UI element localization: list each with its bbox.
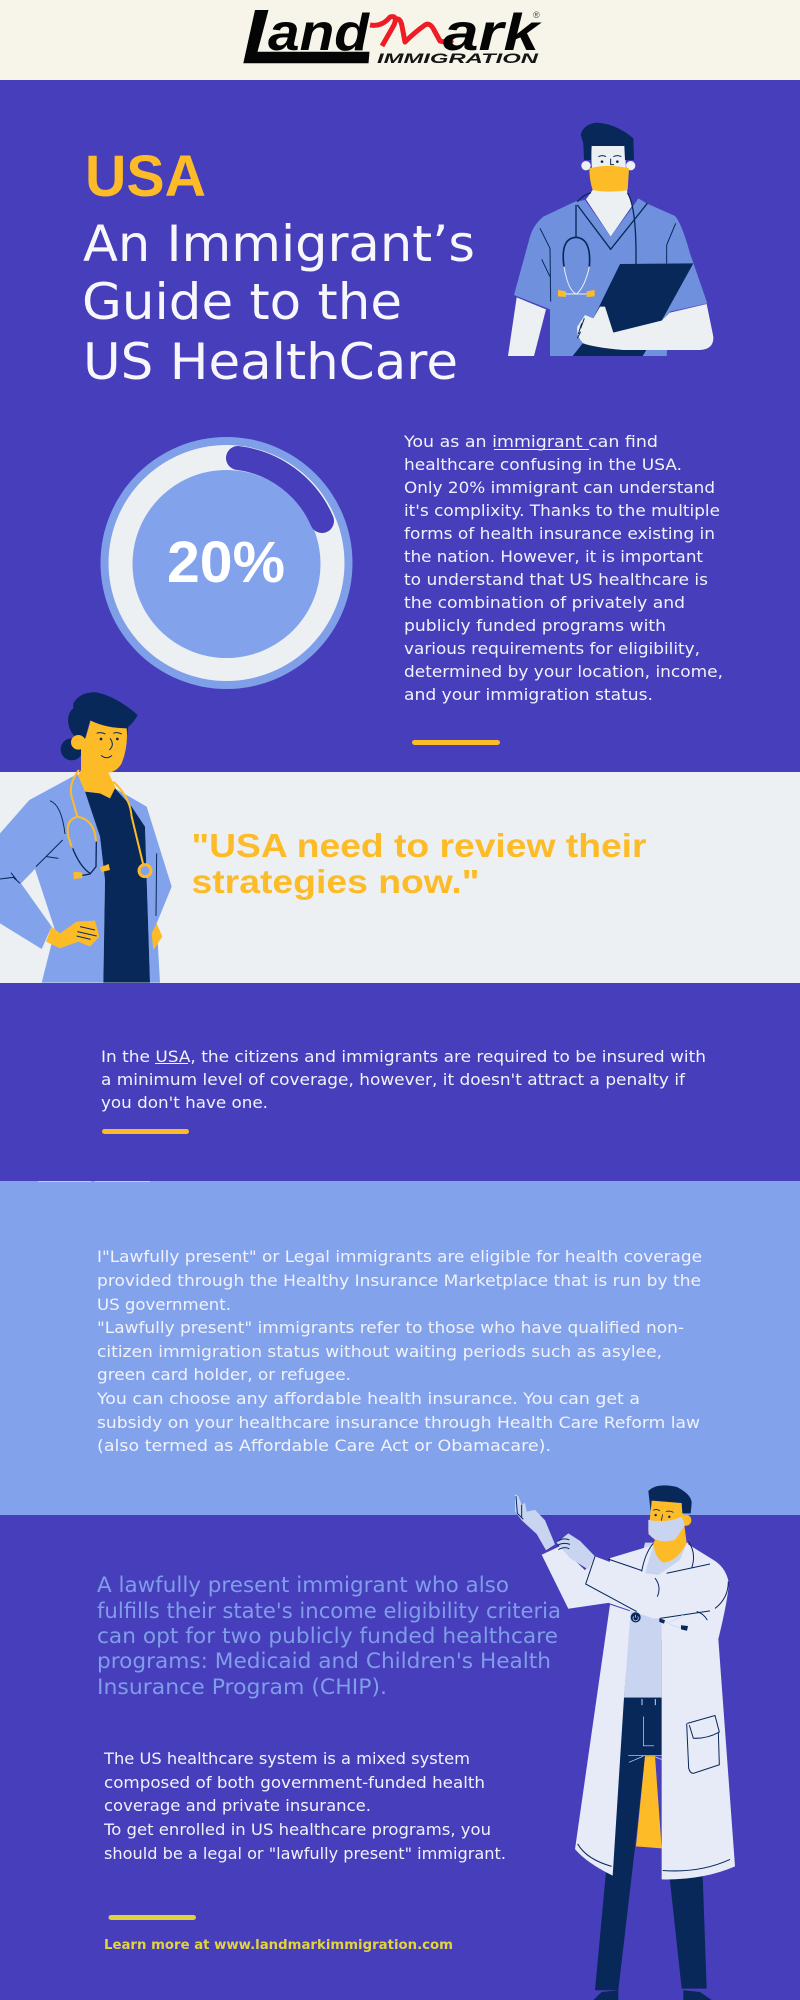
text block: insurance requirement: you don't have one. — [101, 1093, 268, 1112]
title: An Immigrant's Guide to the US HealthCare: Guide to the — [82, 273, 402, 331]
accent bar — [102, 1129, 189, 1134]
text block: eligibility details: "Lawfully present" immigrants refer to those who have qualified non- — [97, 1318, 684, 1337]
text block: Medicaid and CHIP highlight: Insurance Program (CHIP). — [97, 1675, 387, 1699]
text block: mixed healthcare system: To get enrolled in US healthcare programs, you — [103, 1820, 491, 1839]
text block: Medicaid and CHIP highlight — [97, 1573, 561, 1699]
text block: intro paragraph: publicly funded programs with — [404, 616, 666, 635]
quote text — [192, 827, 647, 900]
text block: eligibility details: I"Lawfully present" or Legal immigrants are eligible for health coverage — [97, 1247, 702, 1266]
panel: lawfully present immigrants — [0, 1181, 800, 1515]
text block: eligibility details: subsidy on your healthcare insurance through Health Care Reform law — [97, 1413, 700, 1432]
title: An Immigrant's Guide to the US HealthCare: An Immigrant’s — [83, 215, 475, 273]
text block: intro paragraph: You as an immigrant can find — [403, 432, 658, 451]
illustration: female doctor with stethoscope — [0, 692, 172, 983]
text block: mixed healthcare system — [103, 1749, 506, 1863]
text block: intro paragraph: the combination of privately and — [404, 593, 685, 612]
text block: eligibility details: US government. — [97, 1295, 231, 1314]
text block: intro paragraph: to understand that US healthcare is — [404, 570, 708, 589]
logo: Landmark Immigration: ark — [443, 4, 543, 62]
accent bar — [108, 1915, 196, 1920]
text block: Medicaid and CHIP highlight: fulfills their state's income eligibility criteria — [97, 1599, 561, 1623]
text block: intro paragraph — [403, 432, 723, 704]
text block: insurance requirement: In the USA, the citizens and immigrants are required to be insured with — [101, 1047, 706, 1066]
text block: intro paragraph: various requirements for eligibility, — [404, 639, 700, 658]
logo: Landmark Immigration: IMMIGRATION — [377, 50, 539, 66]
panel: quote band — [0, 772, 800, 983]
logo: Landmark Immigration: ® — [533, 10, 540, 20]
text block: insurance requirement — [101, 1047, 706, 1112]
text block: Medicaid and CHIP highlight: programs: Medicaid and Children's Health — [97, 1649, 551, 1673]
text block: insurance requirement: a minimum level of coverage, however, it doesn't attract a penalty if — [101, 1070, 685, 1089]
accent bar — [412, 740, 500, 745]
title: An Immigrant's Guide to the US HealthCare — [82, 215, 475, 391]
text block: eligibility details: provided through the Healthy Insurance Marketplace that is run by the — [97, 1271, 701, 1290]
text block: eligibility details: You can choose any affordable health insurance. You can get a — [96, 1389, 640, 1408]
text block: intro paragraph: the nation. However, it is important — [404, 547, 703, 566]
text block: intro paragraph: Only 20% immigrant can understand — [404, 478, 715, 497]
chart value: 20%: 20% — [167, 530, 285, 595]
text block: Medicaid and CHIP highlight: can opt for two publicly funded healthcare — [97, 1624, 558, 1648]
text block: intro paragraph: it's complixity. Thanks to the multiple — [404, 501, 720, 520]
panel: logo header — [0, 0, 800, 80]
text block: mixed healthcare system: coverage and private insurance. — [104, 1796, 371, 1815]
title: USA: USA — [85, 144, 206, 209]
quote text: "USA need to review their — [192, 827, 647, 864]
text block: intro paragraph: determined by your location, income, — [404, 662, 723, 681]
text block: intro paragraph: and your immigration status. — [404, 685, 653, 704]
logo: Landmark Immigration: and — [268, 4, 370, 62]
quote text: strategies now." — [192, 863, 480, 900]
text block: mixed healthcare system: composed of both government-funded health — [104, 1773, 485, 1792]
text block: eligibility details: citizen immigration status without waiting periods such as asylee, — [97, 1342, 662, 1361]
title: An Immigrant's Guide to the US HealthCare: US HealthCare — [83, 333, 458, 391]
illustration: doctor in white coat pointing up — [515, 1485, 735, 2000]
text block: mixed healthcare system: The US healthcare system is a mixed system — [103, 1749, 470, 1768]
text block: eligibility details: green card holder, or refugee. — [97, 1365, 351, 1384]
illustration: masked nurse with clipboard — [508, 123, 713, 356]
logo: Landmark Immigration — [243, 4, 543, 66]
call to action: website: Learn more at www.landmarkimmigration.com — [104, 1938, 453, 1953]
chart: 20% progress ring — [100, 437, 352, 689]
text block: mixed healthcare system: should be a legal or "lawfully present" immigrant. — [104, 1844, 506, 1863]
text block: intro paragraph: forms of health insurance existing in — [404, 524, 715, 543]
text block: eligibility details — [96, 1247, 702, 1455]
text block: Medicaid and CHIP highlight: A lawfully present immigrant who also — [97, 1573, 509, 1597]
text block: intro paragraph: healthcare confusing in the USA. — [404, 455, 682, 474]
text block: eligibility details: (also termed as Affordable Care Act or Obamacare). — [97, 1436, 551, 1455]
